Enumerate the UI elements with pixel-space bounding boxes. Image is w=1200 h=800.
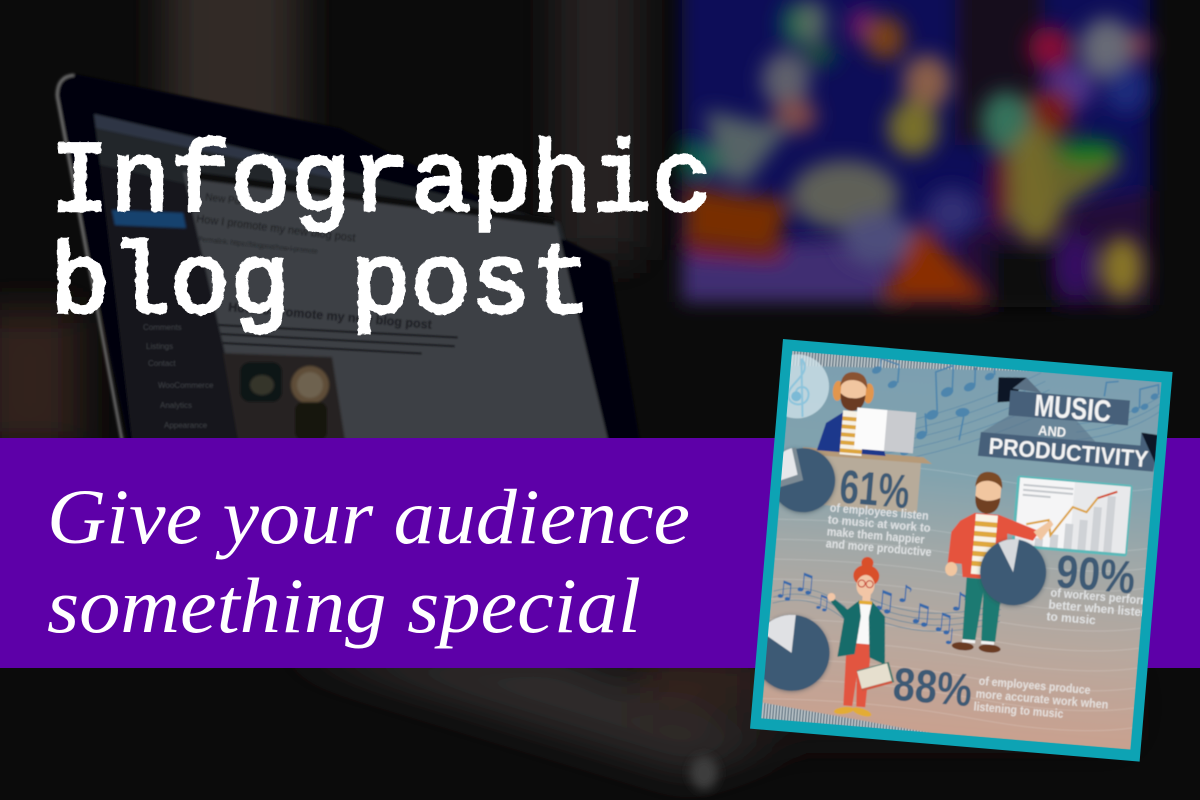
- caption 90%: better when listen: [1048, 597, 1149, 620]
- post editor area: [183, 172, 608, 440]
- subtitle: Give your audience: [47, 473, 690, 560]
- blurred screen text: How to promote my new blog post: [228, 300, 433, 332]
- caption 90%: to music: [1046, 609, 1097, 627]
- book: [857, 662, 894, 691]
- title: [50, 128, 712, 343]
- lower music staff and notes: ♫: [930, 608, 956, 639]
- blurred sidebar menu: Listings: [146, 342, 173, 351]
- caption 61%: make them happier: [826, 526, 925, 547]
- lower music staff and notes: ♪: [897, 580, 914, 609]
- title ribbons: PRODUCTIVITY: [988, 433, 1149, 472]
- blurred sidebar menu: WooCommerce: [158, 381, 214, 390]
- icon: treble clef circle: [786, 354, 830, 419]
- laptop: [56, 74, 640, 440]
- lower music staff and notes: ♫: [870, 583, 898, 618]
- background wave lines: [762, 456, 1153, 736]
- woman with book: [826, 556, 886, 718]
- title ribbons: [978, 374, 1161, 473]
- pie chart 90%: [977, 536, 1049, 608]
- stat 88%: 88%: [891, 658, 974, 716]
- stat 61%: 61%: [838, 459, 912, 518]
- blurred screen text: Permalink: https://blogpost/how-i-promote: [198, 236, 318, 256]
- teal frame: [750, 339, 1173, 762]
- caption 61%: [825, 502, 935, 559]
- subtitle: something special: [47, 562, 641, 649]
- cafe photo: [223, 353, 345, 440]
- blurred foreground below the banner: [280, 650, 1130, 775]
- stat 90%: 90%: [1054, 545, 1137, 603]
- lower music staff and notes: ♫: [773, 575, 796, 605]
- blurred sidebar menu: Analytics: [160, 401, 192, 410]
- blurred screen text: New Post: [205, 192, 249, 208]
- lower music staff and notes: [772, 572, 1002, 645]
- lower music staff and notes: ♫: [907, 597, 935, 632]
- title ribbons: MUSIC: [1033, 388, 1113, 429]
- blurred sidebar menu: Contact: [148, 359, 176, 368]
- man pointing at chart: [944, 471, 1054, 654]
- top hatch strip: [792, 351, 1026, 372]
- laptop illustration: [854, 408, 916, 453]
- caption 88%: [974, 676, 1108, 718]
- purple banner: [0, 438, 1200, 668]
- title: Infographic: [50, 128, 712, 241]
- caption 88%: listening to music: [973, 699, 1064, 721]
- lower music staff and notes: ♩: [943, 625, 956, 651]
- lower music staff and notes: ♫: [812, 590, 832, 615]
- pie chart 88%: [764, 613, 832, 694]
- subtitle: [47, 473, 690, 649]
- pie chart 61%: [779, 446, 838, 516]
- colourful monitor: [678, 0, 1150, 307]
- blurred sidebar menu: [143, 323, 214, 430]
- man with headphones at laptop: [816, 372, 886, 457]
- blurred sidebar menu: Comments: [143, 323, 182, 332]
- caption 61%: of employees listen: [829, 503, 929, 523]
- caption 88%: of employees produce: [978, 674, 1091, 697]
- blurred sidebar menu: Appearance: [164, 421, 208, 430]
- upper music staff and notes: [872, 358, 1160, 456]
- caption 61%: to music at work to: [827, 514, 931, 535]
- infographic thumbnail card: [736, 338, 1173, 762]
- lower music staff and notes: ♫: [792, 568, 818, 600]
- title ribbons: AND: [1038, 422, 1067, 440]
- caption 88%: more accurate work when: [975, 687, 1109, 712]
- chart panel: [1011, 475, 1133, 557]
- desk: [798, 447, 932, 514]
- wall bands behind the laptop: [0, 0, 640, 450]
- blurred screen text: [196, 192, 458, 354]
- caption 90%: of workers perform: [1050, 586, 1151, 608]
- laptop lid and silver edge: [56, 74, 640, 440]
- browser bar: [94, 114, 565, 240]
- title: blog post: [50, 230, 591, 343]
- card background: [761, 351, 1162, 750]
- admin sidebar: [100, 165, 245, 440]
- caption 61%: and more productive: [825, 538, 932, 559]
- bottom hatch strip: [761, 703, 932, 733]
- lower music staff and notes: ♪: [950, 587, 969, 618]
- caption 90%: [1046, 588, 1144, 625]
- blurred screen text: How I promote my new blog post: [196, 213, 356, 244]
